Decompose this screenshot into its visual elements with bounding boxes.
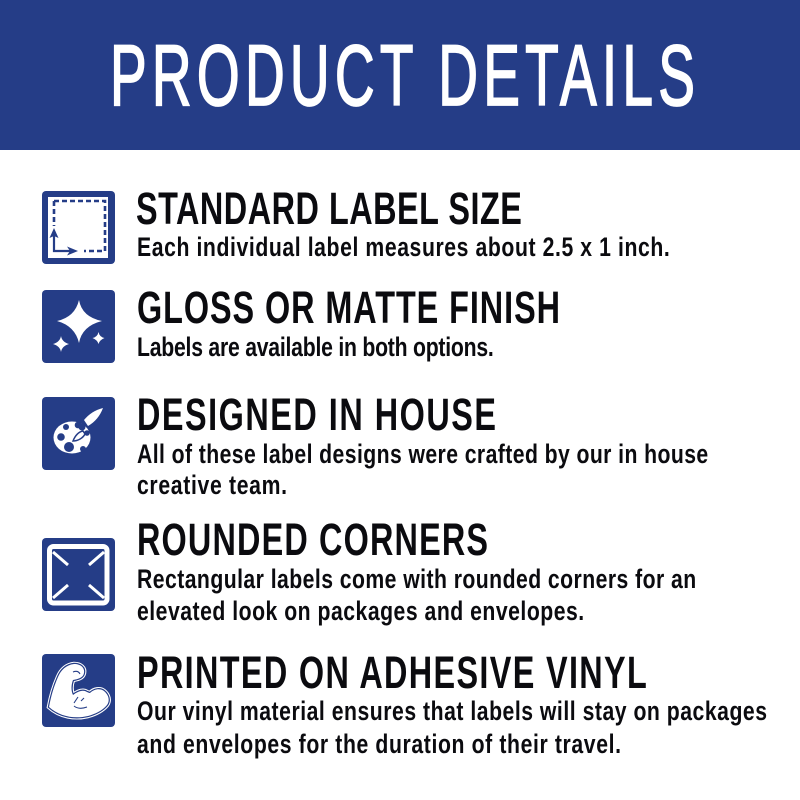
heading: DESIGNED IN HOUSE [137, 391, 496, 440]
description [137, 440, 708, 501]
heading: ROUNDED CORNERS [137, 516, 488, 565]
icon: sparkles [42, 290, 115, 363]
description: elevated look on packages and envelopes. [137, 597, 584, 627]
description: creative team. [137, 471, 287, 501]
title: PRODUCT DETAILS [110, 29, 695, 124]
item: standard label size [42, 185, 670, 264]
item: gloss or matte finish [42, 284, 560, 363]
icon: palette and brush [42, 397, 115, 470]
heading: STANDARD LABEL SIZE [136, 185, 522, 234]
header banner [0, 0, 800, 150]
icon: corner arrows [42, 538, 115, 611]
heading: GLOSS OR MATTE FINISH [137, 284, 560, 333]
description: Our vinyl material ensures that labels will stay on packages [137, 697, 767, 727]
icon: flexed arm [42, 654, 115, 727]
description: Rectangular labels come with rounded corners for an [137, 565, 696, 595]
item: designed in house [42, 391, 708, 501]
description: Each individual label measures about 2.5 x 1 inch. [137, 233, 670, 263]
description: All of these label designs were crafted by our in house [137, 440, 708, 470]
description [137, 697, 767, 760]
item: printed on adhesive vinyl [42, 649, 767, 760]
description: Labels are available in both options. [137, 333, 494, 363]
description [137, 565, 696, 627]
heading: PRINTED ON ADHESIVE VINYL [137, 649, 647, 698]
icon: label dimensions [42, 191, 115, 264]
description: and envelopes for the duration of their travel. [137, 730, 621, 760]
item: rounded corners [42, 516, 696, 627]
